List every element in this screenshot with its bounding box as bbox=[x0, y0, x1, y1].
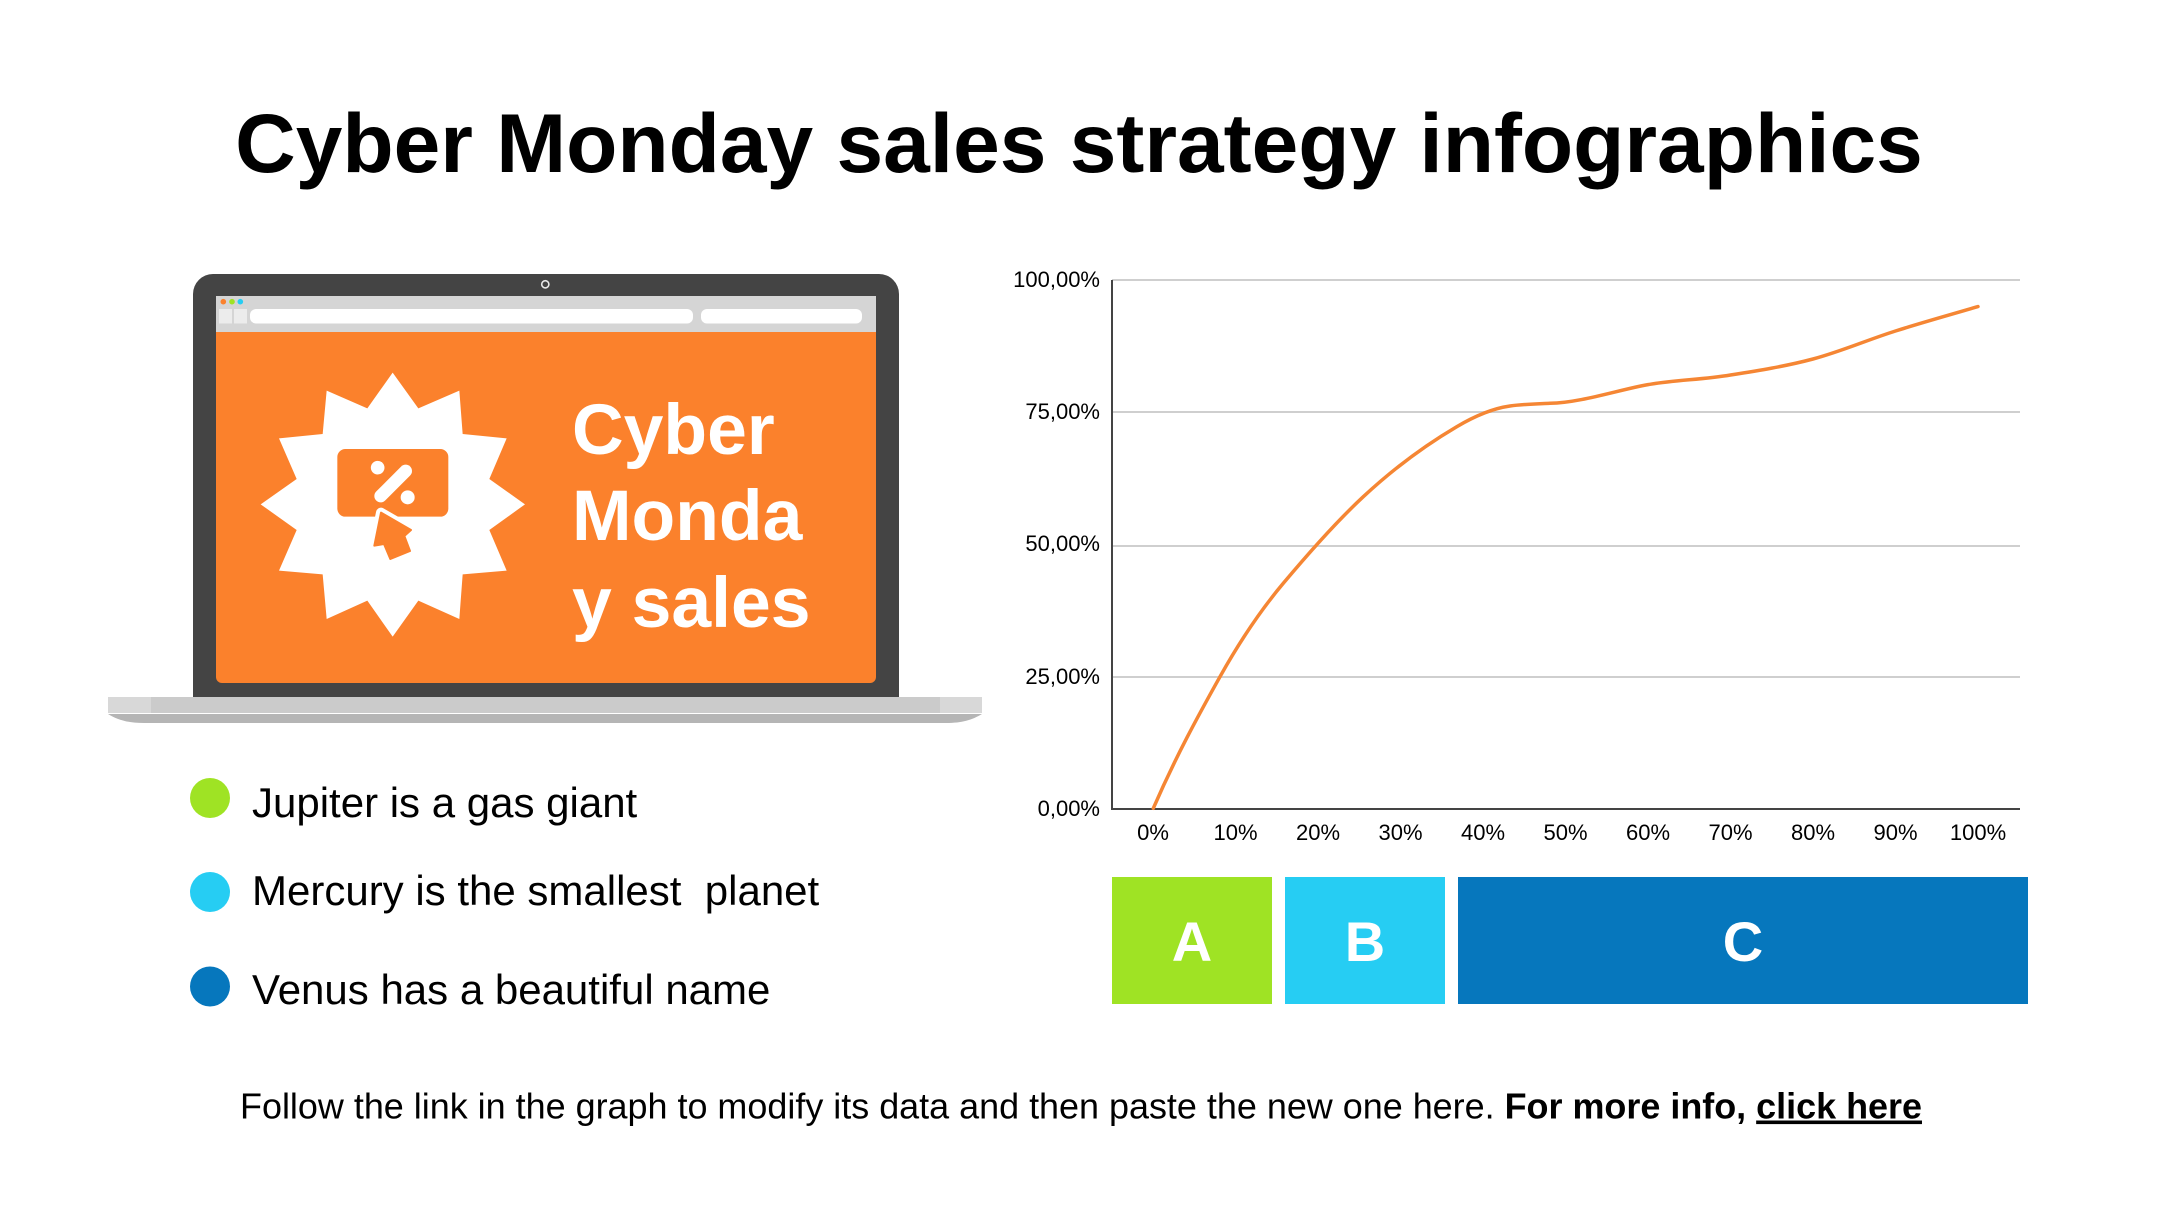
segment B bbox=[1285, 877, 1445, 1004]
title: Cyber Monday sales strategy infographics bbox=[235, 96, 1923, 190]
y axis labels: 0,00% bbox=[1038, 796, 1100, 821]
screen text: y sales bbox=[572, 563, 811, 643]
x axis labels: 10% bbox=[1213, 820, 1258, 845]
legend item: Venus: Venus has a beautiful name bbox=[252, 966, 770, 1013]
legend item: Mercury: Mercury is the smallest planet bbox=[252, 867, 820, 914]
webcam bbox=[542, 281, 549, 288]
x axis labels bbox=[1137, 820, 2006, 845]
y axis labels: 25,00% bbox=[1025, 664, 1100, 689]
x axis labels: 40% bbox=[1461, 820, 1505, 845]
segment B: B bbox=[1345, 910, 1385, 973]
browser toolbar bbox=[216, 296, 876, 332]
y axis labels: 75,00% bbox=[1025, 399, 1100, 424]
data line bbox=[1153, 307, 1978, 808]
x axis labels: 90% bbox=[1873, 820, 1918, 845]
screen text: Monda bbox=[572, 476, 804, 556]
x axis labels: 80% bbox=[1791, 820, 1835, 845]
legend bbox=[190, 778, 820, 1013]
screen text bbox=[572, 390, 811, 643]
browser screen bbox=[216, 332, 876, 683]
y axis labels: 100,00% bbox=[1013, 267, 1100, 292]
screen text: Cyber bbox=[572, 390, 775, 470]
x axis labels: 100% bbox=[1950, 820, 2006, 845]
footer note: Follow the link in the graph to modify its data and then paste the new one here. For more info, click here bbox=[240, 1086, 1922, 1126]
segment A: A bbox=[1172, 910, 1212, 973]
laptop base bbox=[108, 697, 982, 723]
segment C bbox=[1458, 877, 2028, 1004]
segment A bbox=[1112, 877, 1272, 1004]
line chart bbox=[1013, 267, 2020, 845]
chart gridlines bbox=[1112, 280, 2020, 677]
x axis labels: 50% bbox=[1543, 820, 1588, 845]
chart axes bbox=[1112, 280, 2020, 809]
x axis labels: 0% bbox=[1137, 820, 1169, 845]
x axis labels: 30% bbox=[1378, 820, 1423, 845]
y axis labels: 50,00% bbox=[1025, 531, 1100, 556]
legend item: Jupiter: Jupiter is a gas giant bbox=[252, 779, 638, 826]
segment bar bbox=[1112, 877, 2028, 1004]
laptop illustration bbox=[108, 274, 982, 723]
x axis labels: 60% bbox=[1626, 820, 1670, 845]
laptop lid bbox=[193, 274, 899, 697]
y axis labels bbox=[1013, 267, 1100, 821]
x axis labels: 20% bbox=[1296, 820, 1340, 845]
x axis labels: 70% bbox=[1708, 820, 1753, 845]
segment C: C bbox=[1723, 910, 1763, 973]
icon: discount starburst bbox=[261, 373, 525, 637]
